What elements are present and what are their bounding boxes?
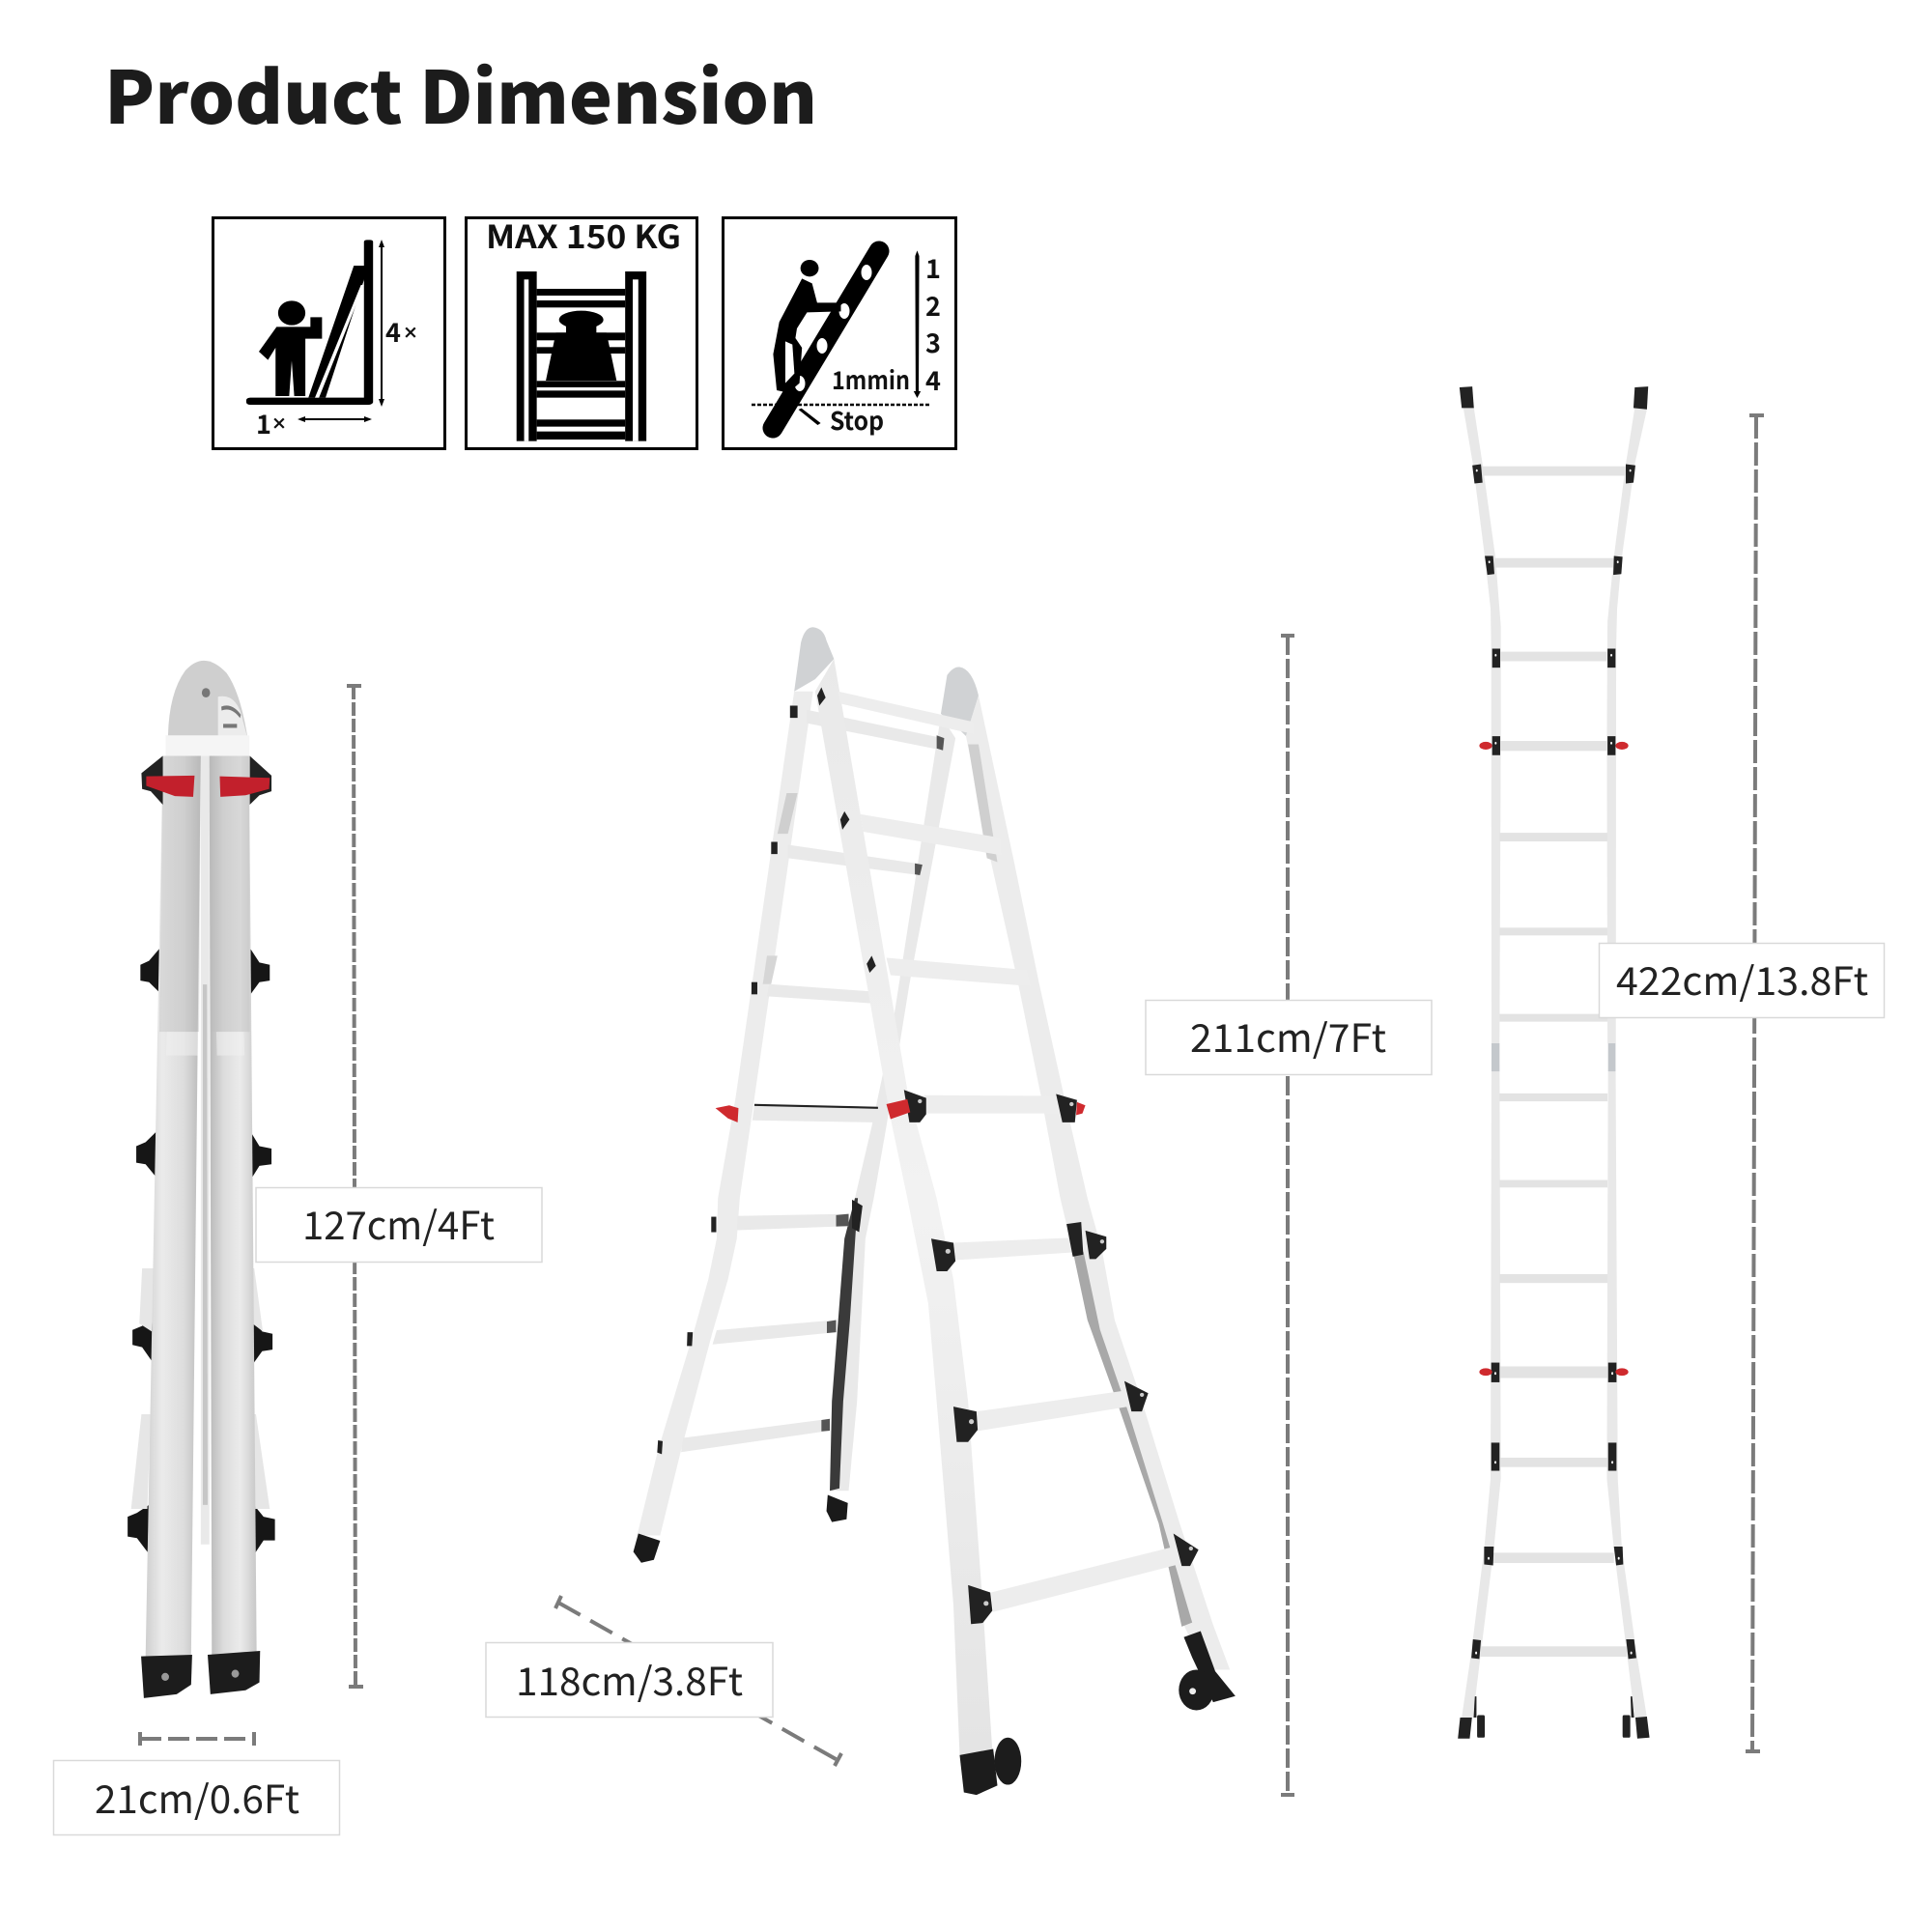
- panel: climbing rule icon: [723, 218, 956, 448]
- label: 127cm/4Ft: 127cm/4Ft: [302, 1195, 495, 1251]
- dimension line: folded width: [140, 1732, 254, 1746]
- label: 422cm/13.8Ft: [1600, 943, 1884, 1018]
- panel: climbing rule icon: 4: [925, 360, 941, 398]
- panel: climbing rule icon: 1mmin: [832, 361, 910, 397]
- dimension line: extended height: [1746, 415, 1764, 1751]
- title: Product Dimension: [104, 40, 817, 145]
- label: 127cm/4Ft: [256, 1188, 542, 1262]
- panel: climbing rule icon: 2: [925, 286, 941, 324]
- panel: ladder angle icon: ×: [403, 322, 418, 343]
- label: 211cm/7Ft: [1146, 1001, 1432, 1074]
- panel: ladder angle icon: ×: [271, 412, 287, 434]
- label: 211cm/7Ft: 211cm/7Ft: [1190, 1008, 1386, 1064]
- panel: max load icon: MAX 150 KG: [486, 212, 681, 258]
- panel: ladder angle icon: 4: [385, 312, 401, 350]
- panel: climbing rule icon: Stop: [830, 402, 884, 438]
- extended ladder: [1458, 386, 1650, 1739]
- dimension line: folded height: [347, 686, 363, 1687]
- label: 21cm/0.6Ft: 21cm/0.6Ft: [95, 1769, 299, 1825]
- label: 422cm/13.8Ft: 422cm/13.8Ft: [1616, 951, 1868, 1007]
- label: 21cm/0.6Ft: [54, 1760, 340, 1835]
- panel: ladder angle icon: 1: [256, 404, 271, 441]
- panel: max load icon: [466, 212, 697, 448]
- panel: climbing rule icon: 1: [925, 248, 941, 286]
- label: 118cm/3.8Ft: 118cm/3.8Ft: [516, 1651, 743, 1707]
- dimension line: base width: [555, 1596, 841, 1766]
- panel: ladder angle icon: [213, 218, 444, 448]
- middle ladder: [634, 627, 1236, 1795]
- label: 118cm/3.8Ft: [486, 1642, 773, 1718]
- folded ladder: [128, 661, 275, 1698]
- dimension line: A-frame height: [1281, 636, 1294, 1795]
- panel: climbing rule icon: 3: [925, 323, 941, 360]
